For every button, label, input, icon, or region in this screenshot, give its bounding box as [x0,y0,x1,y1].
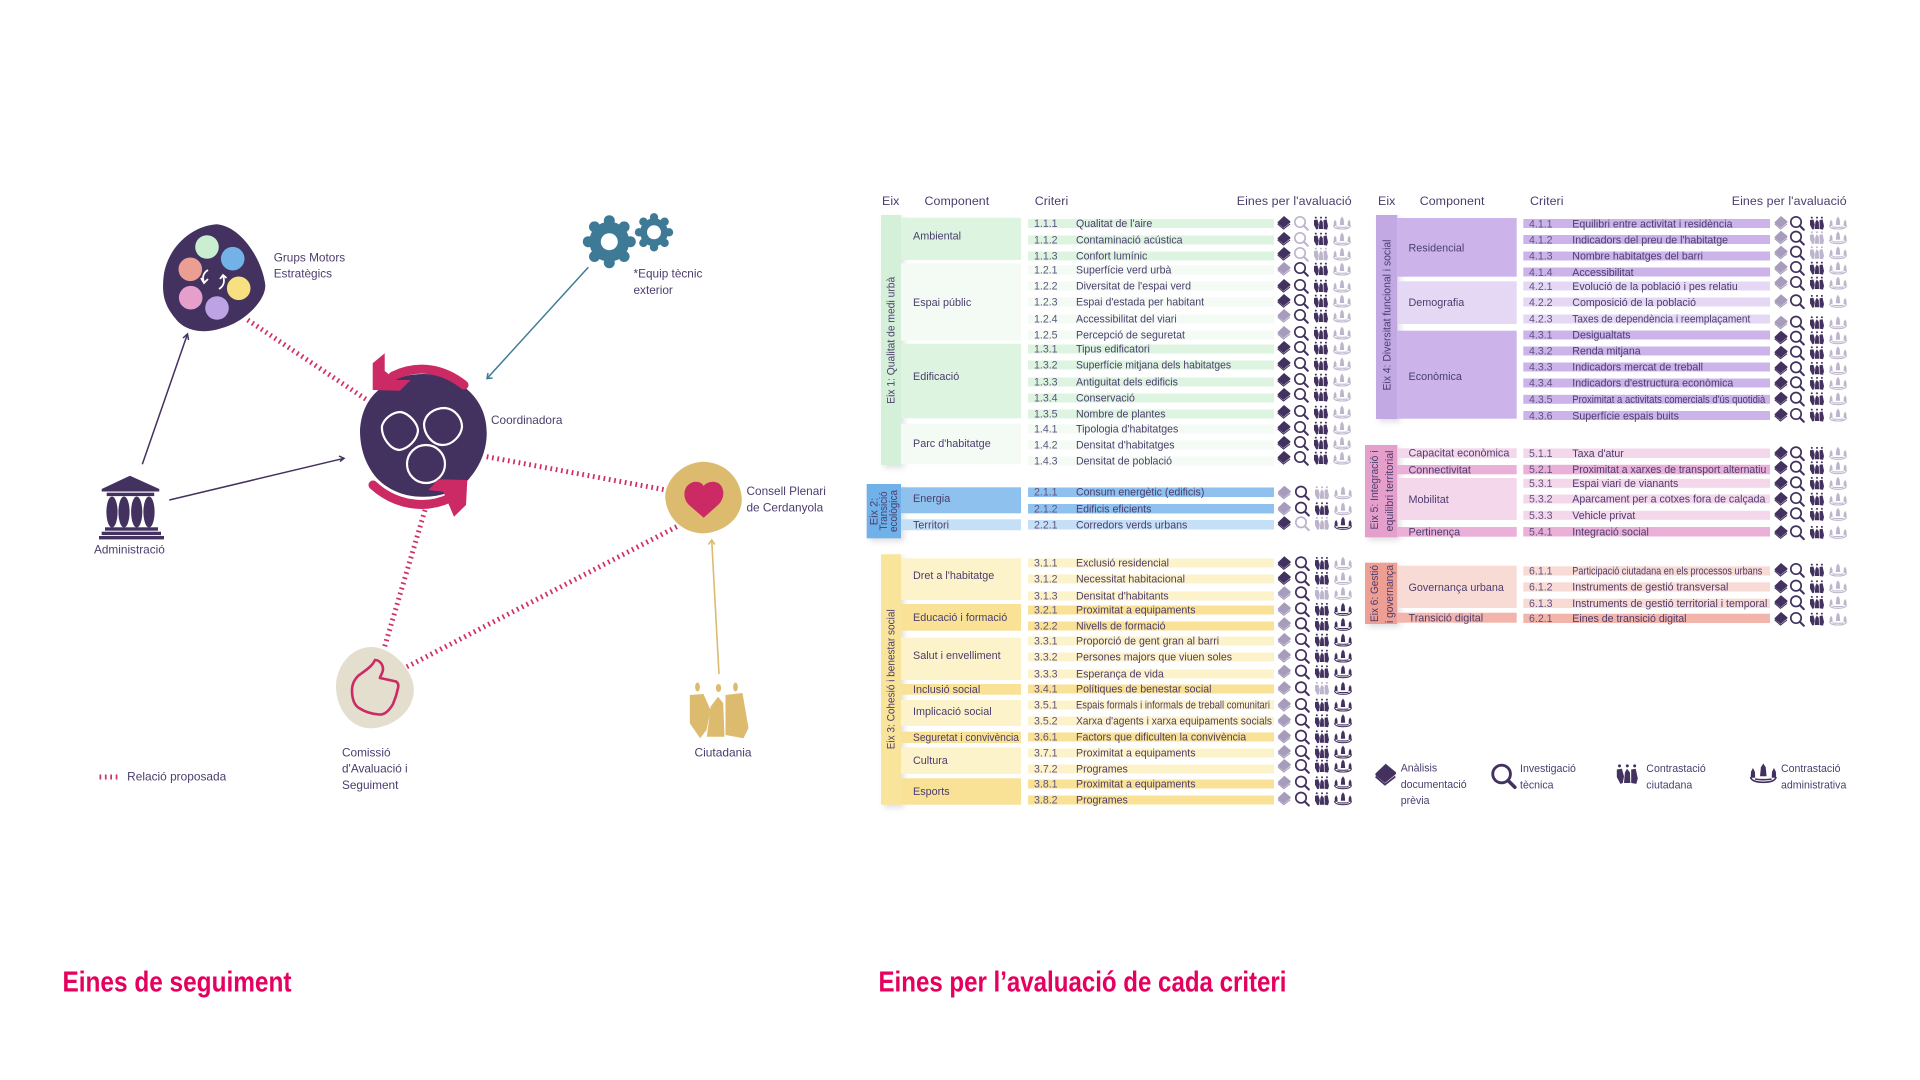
legend item: Investigació tècnica [1493,763,1576,791]
component: Educació i formació [901,604,1021,631]
row 2.1.1: 2.1.1 [1034,487,1058,499]
row 4.1.3: Nombre habitatges del barri [1572,251,1703,263]
row 3.5.1: Espais formals i informals de treball comunitari [1076,700,1270,712]
row 1.4.2: 1.4.2 [1034,440,1058,452]
row 3.7.2: 3.7.2 [1034,764,1058,776]
row 3.1.2: Necessitat habitacional [1076,574,1185,586]
component: Demografia: Demografia [1408,297,1464,309]
row 6.1.2: 6.1.2 [1529,582,1553,594]
legend item: Anàlisis documentació prèvia: Anàlisis [1401,763,1437,775]
link: Grups Motors to Coordinadora [248,320,366,399]
row 4.3.5: 4.3.5 [1529,394,1553,406]
axis label: Eix 4 [1376,215,1397,419]
row 1.2.5 [1028,326,1351,342]
node: Grups Motors [163,224,265,331]
table headers: right: Component [1420,194,1485,208]
row 5.4.1: 5.4.1 [1529,526,1553,538]
row 3.5.1: 3.5.1 [1034,700,1058,712]
component: Cultura [901,747,1021,774]
row 1.2.4: 1.2.4 [1034,314,1058,326]
row 3.2.2: Nivells de formació [1076,621,1166,633]
row 1.2.1 [1028,262,1351,277]
arrow: Ciutadania to Consell Plenari [708,540,719,674]
table headers: left: Eix [882,194,900,208]
row 3.1.1 [1028,556,1352,570]
row 3.6.1: 3.6.1 [1034,732,1058,744]
row 6.2.1 [1523,612,1847,626]
row 4.2.1 [1523,276,1847,293]
row 4.3.6: 4.3.6 [1529,410,1553,422]
row 4.2.3 [1523,314,1847,330]
row 1.3.3 [1028,373,1351,389]
component: Inclusió social [901,684,1021,696]
label: Comissió d'Avaluació i Seguiment: d'Avaluació i [342,762,408,776]
row 3.5.2: 3.5.2 [1034,716,1058,728]
row 5.3.2: 5.3.2 [1529,494,1553,506]
row 1.2.3: Espai d'estada per habitant [1076,297,1204,309]
row 4.2.3: Taxes de dependència i reemplaçament [1572,314,1750,326]
row 1.1.3: Confort lumínic [1076,251,1148,263]
arrow: Equip tècnic to Coordinadora [487,267,588,378]
row 5.1.1: Taxa d'atur [1572,448,1624,460]
table headers: left: Criteri [1035,194,1068,208]
panel: Eix 6 [1365,563,1847,626]
row 3.1.1: 3.1.1 [1034,558,1058,570]
component: Edificació [901,344,1021,418]
row 3.8.1: 3.8.1 [1034,779,1058,791]
label: Comissió d'Avaluació i Seguiment: Seguiment [342,778,399,792]
row 2.1.1: Consum energètic (edificis) [1076,487,1204,499]
row 5.2.1 [1523,461,1847,476]
row 3.7.2 [1028,759,1352,776]
axis label: Eix 6: Eix 6: Gestió [1369,565,1381,622]
node: Consell Plenari [665,462,742,533]
component: Espai públic: Espai públic [913,297,972,309]
panel: governance diagram [94,213,826,792]
row 3.4.1 [1028,681,1352,696]
axis label: Eix 2: Transició [878,492,890,530]
row 4.3.4: 4.3.4 [1529,378,1553,390]
row 4.1.4: 4.1.4 [1529,267,1553,279]
axis label: Eix 6: i governança [1384,564,1396,623]
component: Mobilitat: Mobilitat [1408,494,1449,506]
component: Implicació social: Implicació social [913,706,992,718]
row 6.2.1: Eines de transició digital [1572,613,1687,625]
row 5.4.1 [1523,525,1847,539]
row 4.1.1 [1523,216,1847,230]
row 5.2.1: Proximitat a xarxes de transport alternatiu [1572,464,1766,476]
panel: Eix 1 [881,215,1351,468]
row 3.1.1: Exclusió residencial [1076,558,1169,570]
panel: Eix 5 [1365,445,1847,539]
row 1.4.1 [1028,421,1351,436]
row 4.3.3: Indicadors mercat de treball [1572,362,1703,374]
legend item: Contrastació administrativa: Contrastació [1781,763,1841,775]
component: Econòmica: Econòmica [1408,371,1462,383]
component: Mobilitat [1397,478,1517,520]
label: Grups Motors: Estratègics [274,266,332,280]
row 4.3.4 [1523,376,1847,390]
component: Connectivitat [1397,464,1517,476]
row 4.1.4 [1523,261,1847,279]
legend: evaluation tools [1375,763,1846,807]
row 3.8.2: 3.8.2 [1034,795,1058,807]
axis label: Eix 5: equilibri territorial [1384,450,1396,532]
row 3.2.2 [1028,617,1352,633]
label: Equip tècnic exterior [634,266,702,297]
row 5.3.1: 5.3.1 [1529,478,1553,490]
row 4.1.2: Indicadors del preu de l'habitatge [1572,234,1728,246]
row 1.2.4 [1028,309,1351,326]
component: Residencial [1397,218,1517,277]
row 3.7.1: Proximitat a equipaments [1076,748,1196,760]
row 3.1.3: Densitat d'habitants [1076,591,1169,603]
label: Comissió d'Avaluació i Seguiment: Comissió [342,746,391,760]
row 3.1.3 [1028,586,1352,603]
row 6.1.3: Instruments de gestió territorial i temporal [1572,598,1767,610]
axis label: Eix 4: Eix 4: Diversitat funcional i social [1382,240,1394,390]
row 3.2.1: Proximitat a equipaments [1076,605,1196,617]
legend item: Anàlisis documentació prèvia: documentació [1401,779,1467,791]
row 1.4.2 [1028,436,1351,452]
component: Capacitat econòmica: Capacitat econòmica [1408,448,1509,460]
axis label: Eix 2 [867,484,901,538]
row 4.3.1: 4.3.1 [1529,330,1553,342]
row 3.3.2 [1028,649,1352,664]
component: Seguretat i convivència: Seguretat i convivència [913,732,1019,744]
legend item: Anàlisis documentació prèvia [1375,763,1467,807]
row 1.3.3: Antiguitat dels edificis [1076,377,1178,389]
row 3.4.1: Polítiques de benestar social [1076,684,1211,696]
link: Consell Plenari to Comissió [406,527,677,667]
row 3.2.1: 3.2.1 [1034,605,1058,617]
label: Equip tècnic exterior: exterior [634,283,673,297]
row 4.1.1: Equilibri entre activitat i residència [1572,218,1733,230]
row 1.1.3: 1.1.3 [1034,251,1058,263]
row 6.1.1: 6.1.1 [1529,566,1553,578]
component: Energia [901,487,1021,513]
row 5.2.1: 5.2.1 [1529,464,1553,476]
label: Comissió d'Avaluació i Seguiment [342,746,408,792]
table headers: right: Criteri [1530,194,1564,208]
row 3.3.1 [1028,633,1352,648]
row 1.2.5: Percepció de seguretat [1076,330,1185,342]
row 1.2.3 [1028,294,1351,309]
component: Governança urbana: Governança urbana [1408,582,1504,594]
row 1.3.1: 1.3.1 [1034,344,1058,356]
row 2.2.1: Corredors verds urbans [1076,520,1187,532]
icon: Ciutadania people [690,682,748,738]
row 5.4.1: Integració social [1572,526,1649,538]
row 4.1.1: 4.1.1 [1529,218,1553,230]
axis label: Eix 5 [1365,445,1397,537]
row 1.2.3: 1.2.3 [1034,297,1058,309]
row 3.1.2: 3.1.2 [1034,574,1058,586]
axis label: Eix 6 [1365,563,1397,624]
axis label: Eix 1 [881,215,901,465]
component: Inclusió social: Inclusió social [913,684,980,696]
row 2.1.2 [1028,502,1352,516]
row 1.1.2 [1028,232,1351,247]
row 5.3.1: Espai viari de vianants [1572,478,1678,490]
label: Administració: Administració [94,542,165,556]
row 2.2.1 [1028,516,1352,532]
row 4.2.2: Composició de la població [1572,297,1696,309]
row 4.2.2: 4.2.2 [1529,297,1553,309]
component: Governança urbana [1397,566,1517,608]
row 1.3.2: 1.3.2 [1034,360,1058,372]
row 1.1.1 [1028,216,1351,230]
legend item: Investigació tècnica: Investigació [1520,763,1576,775]
row 3.2.2: 3.2.2 [1034,621,1058,633]
legend item: Anàlisis documentació prèvia: prèvia [1401,795,1430,807]
row 4.2.1: Evolució de la població i pes relatiu [1572,281,1738,293]
row 1.2.2 [1028,279,1351,293]
component: Econòmica [1397,331,1517,419]
row 6.1.1 [1523,563,1847,578]
legend item: Investigació tècnica: tècnica [1520,779,1554,791]
legend item: Contrastació ciutadana: ciutadana [1646,779,1692,791]
row 1.1.2: Contaminació acústica [1076,235,1183,247]
legend item: Contrastació administrativa [1751,763,1846,791]
row 3.5.2: Xarxa d'agents i xarxa equipaments socials [1076,716,1272,728]
row 3.4.1: 3.4.1 [1034,684,1058,696]
row 3.5.2 [1028,714,1352,728]
component: Pertinença: Pertinença [1408,526,1460,538]
row 5.3.3: Vehicle privat [1572,510,1635,522]
row 1.1.1: 1.1.1 [1034,218,1058,230]
icon: Administració temple [99,476,164,539]
row 3.5.1 [1028,698,1352,712]
component: Implicació social [901,700,1021,726]
row 1.3.3: 1.3.3 [1034,377,1058,389]
row 4.3.2 [1523,346,1847,360]
row 3.3.1: 3.3.1 [1034,636,1058,648]
legend: Relació proposada: Relació proposada [127,770,227,784]
table headers: right [1378,194,1847,208]
link: Coordinadora to Comissió [384,510,425,647]
axis label: Eix 2: ecològica [888,489,900,532]
component: Salut i envelliment [901,638,1021,680]
row 1.3.1 [1028,341,1351,356]
component: Parc d'habitatge [901,424,1021,464]
component: Pertinença [1397,526,1517,538]
row 1.2.1: 1.2.1 [1034,265,1058,277]
row 2.1.2: Edificis eficients [1076,504,1151,516]
component: Transició digital: Transició digital [1408,612,1483,624]
axis label: Eix 1: Eix 1: Qualitat de medi urbà [886,276,898,404]
row 4.3.3: 4.3.3 [1529,362,1553,374]
row 3.6.1 [1028,730,1352,744]
label: Coordinadora: Coordinadora [491,413,563,427]
label: Consell Plenari de Cerdanyola: Consell Plenari [746,484,826,498]
row 3.3.2: Persones majors que viuen soles [1076,652,1232,664]
row 3.8.2: Programes [1076,795,1128,807]
component: Educació i formació: Educació i formació [913,612,1007,624]
label: Consell Plenari de Cerdanyola: de Cerdanyola [746,501,824,515]
component: Transició digital [1397,612,1517,624]
table headers: left: Eines per l'avaluació [1237,194,1352,208]
panel: Eix 4 [1376,215,1847,422]
row 3.3.2: 3.3.2 [1034,652,1058,664]
row 1.3.1: Tipus edificatori [1076,344,1150,356]
row 4.3.6: Superfície espais buits [1572,410,1679,422]
row 1.4.1: 1.4.1 [1034,424,1058,436]
row 1.1.2: 1.1.2 [1034,235,1058,247]
row 1.3.5 [1028,405,1351,421]
row 1.2.1: Superfície verd urbà [1076,265,1172,277]
legend item: Contrastació administrativa: administrativa [1781,779,1846,791]
row 4.1.4: Accessibilitat [1572,267,1634,279]
row 4.2.3: 4.2.3 [1529,314,1553,326]
axis label: Eix 5: Eix 5: Integració i [1369,450,1381,530]
label: Grups Motors: Grups Motors [274,250,345,264]
component: Esports: Esports [913,786,950,798]
row 5.3.3 [1523,507,1847,522]
row 2.1.2: 2.1.2 [1034,504,1058,516]
component: Esports [901,778,1021,805]
row 3.6.1: Factors que dificulten la convivència [1076,732,1246,744]
row 5.3.2: Aparcament per a cotxes fora de calçada [1572,494,1766,506]
row 1.1.1: Qualitat de l'aire [1076,218,1152,230]
row 3.3.3 [1028,665,1352,681]
row 4.3.5: Proximitat a activitats comercials d'ús quotidià [1572,394,1765,406]
row 5.3.1 [1523,476,1847,490]
row 3.8.2 [1028,792,1352,807]
row 3.3.3: Esperança de vida [1076,669,1164,681]
component: Territori: Territori [913,520,949,532]
icon: gears, Equip tècnic exterior [583,213,673,268]
row 6.1.3: 6.1.3 [1529,598,1553,610]
row 6.1.2 [1523,580,1847,594]
component: Territori [901,519,1021,532]
label: Consell Plenari de Cerdanyola [746,484,826,515]
axis label: Eix 3 [881,554,901,805]
component: Salut i envelliment: Salut i envelliment [913,650,1001,662]
row 4.2.1: 4.2.1 [1529,281,1553,293]
row 1.3.5: Nombre de plantes [1076,409,1166,421]
row 2.2.1: 2.2.1 [1034,520,1058,532]
row 1.3.4: 1.3.4 [1034,393,1058,405]
row 4.3.4: Indicadors d'estructura econòmica [1572,378,1733,390]
row 6.1.3 [1523,595,1847,610]
row 4.3.3 [1523,361,1847,375]
component: Edificació: Edificació [913,371,959,383]
row 5.1.1 [1523,446,1847,460]
table headers: left [882,194,1352,208]
row 3.7.1: 3.7.1 [1034,748,1058,760]
row 4.1.3: 4.1.3 [1529,251,1553,263]
row 4.2.2 [1523,294,1847,309]
row 1.2.4: Accessibilitat del viari [1076,314,1177,326]
row 4.3.5 [1523,392,1847,406]
row 5.3.3: 5.3.3 [1529,510,1553,522]
axis label: Eix 3: Eix 3: Cohesió i benestar social [886,609,898,749]
link: Coordinadora to Consell Plenari [487,457,666,490]
row 1.3.2: Superfície mitjana dels habitatges [1076,360,1231,372]
legend item: Contrastació ciutadana: Contrastació [1646,763,1706,775]
legend item: Contrastació ciutadana [1617,763,1706,791]
label: Ciutadania: Ciutadania [694,746,752,760]
row 3.8.1: Proximitat a equipaments [1076,779,1196,791]
row 4.3.2: 4.3.2 [1529,346,1553,358]
row 4.3.2: Renda mitjana [1572,346,1641,358]
row 3.7.2: Programes [1076,764,1128,776]
component: Espai públic [901,263,1021,341]
row 1.2.2: Diversitat de l'espai verd [1076,281,1191,293]
row 4.3.6 [1523,408,1847,422]
axis label: Eix 2: Eix 2: [868,498,880,525]
title: Eines de seguiment: Eines de seguiment [62,967,292,999]
label: Equip tècnic exterior: *Equip tècnic [634,266,702,280]
component: Residencial: Residencial [1408,242,1464,254]
row 4.1.2: 4.1.2 [1529,234,1553,246]
component: Dret a l'habitatge: Dret a l'habitatge [913,570,994,582]
row 1.3.4: Conservació [1076,393,1135,405]
row 3.8.1 [1028,776,1352,791]
row 6.1.1: Participació ciutadana en els processos urbans [1572,566,1762,578]
row 6.1.2: Instruments de gestió transversal [1572,582,1728,594]
component: Ambiental [901,218,1021,260]
row 1.1.3 [1028,247,1351,263]
row 3.2.1 [1028,602,1352,617]
arrow: Administració to Coordinadora [169,456,344,500]
row 3.3.3: 3.3.3 [1034,669,1058,681]
row 1.4.3: 1.4.3 [1034,456,1058,468]
row 1.4.1: Tipologia d'habitatges [1076,424,1178,436]
table headers: right: Eines per l'avaluació [1732,194,1847,208]
row 1.2.2: 1.2.2 [1034,281,1058,293]
table headers: left: Component [924,194,990,208]
row 4.3.1 [1523,330,1847,344]
row 3.7.1 [1028,745,1352,760]
title: Eines per l'avaluació de cada criteri: Eines per l’avaluació de cada criteri [878,967,1286,999]
label: Grups Motors [274,250,345,280]
row 1.3.5: 1.3.5 [1034,409,1058,421]
row 3.1.2 [1028,571,1352,586]
component: Ambiental: Ambiental [913,230,961,242]
table headers: right: Eix [1378,194,1396,208]
component: Energia: Energia [913,493,950,505]
row 3.1.3: 3.1.3 [1034,591,1058,603]
row 4.3.1: Desigualtats [1572,330,1631,342]
row 4.1.3 [1523,246,1847,263]
row 2.1.1 [1028,486,1352,500]
row 3.3.1: Proporció de gent gran al barri [1076,636,1219,648]
node: Comissió d'Avaluació i Seguiment [336,647,414,728]
row 5.1.1: 5.1.1 [1529,448,1553,460]
row 1.4.3 [1028,451,1351,468]
row 1.3.2 [1028,357,1351,372]
component: Demografia [1397,281,1517,324]
row 1.4.2: Densitat d'habitatges [1076,440,1175,452]
row 1.2.5: 1.2.5 [1034,330,1058,342]
component: Cultura: Cultura [913,755,948,767]
arrow: Administració to Grups Motors [142,334,188,464]
node: Coordinadora [360,353,487,517]
row 1.3.4 [1028,388,1351,405]
panel: Eix 2 [867,484,1352,538]
panel: Eix 3 [881,554,1352,807]
component: Dret a l'habitatge [901,558,1021,600]
row 4.1.2 [1523,231,1847,246]
component: Connectivitat: Connectivitat [1408,464,1471,476]
row 5.3.2 [1523,492,1847,506]
row 6.2.1: 6.2.1 [1529,613,1553,625]
component: Parc d'habitatge: Parc d'habitatge [913,438,991,450]
row 1.4.3: Densitat de població [1076,456,1172,468]
